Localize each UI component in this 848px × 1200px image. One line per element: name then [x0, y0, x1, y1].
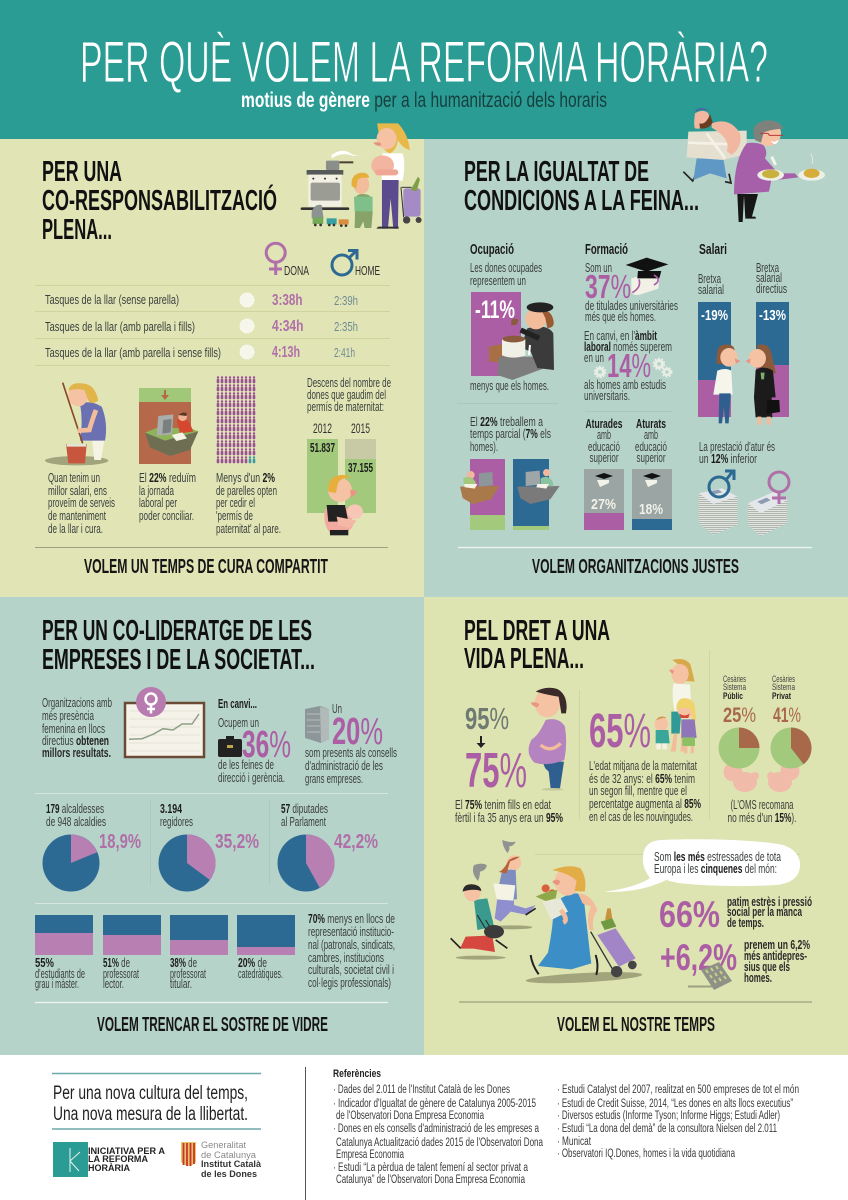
stat: 37%: 37% [585, 268, 631, 305]
chart: caesareans: (L'OMS recomana [730, 797, 794, 812]
text: better salary: proveïm de serveis [48, 495, 115, 510]
stat: 95% to 75%: 95% [465, 701, 509, 736]
chart: maternity leave decline [307, 375, 391, 513]
gender symbols and columns [266, 243, 380, 278]
heading: per un co-lideratge: PER UN CO-LIDERATGE DE LES [42, 615, 312, 647]
column: formació: En canvi, en l'àmbit [584, 328, 657, 343]
logo: iniciativa per a la reforma horària: LA REFORMA [88, 1154, 148, 1165]
illustration: rushing women [451, 840, 642, 985]
logo: generalitat institut català de les dones: Institut Català [201, 1159, 262, 1169]
stat: 95% to 75% [455, 701, 563, 825]
references [333, 1068, 799, 1186]
column: formació: més que els homes. [585, 309, 656, 324]
column: formació: educació [588, 439, 620, 454]
table: hours of housework: Tasques de la llar (sense parella) [45, 292, 179, 307]
text: better results: Organitzacions amb [42, 695, 112, 710]
text: paternity leave [216, 470, 281, 536]
column: ocupació: menys que els homes. [470, 378, 549, 393]
stat: 65% second child: en el cas de les nouvingudes. [589, 809, 693, 824]
stat: 65% second child [589, 705, 701, 824]
stat: 65% second child: 65% [589, 705, 651, 758]
chart: caesareans: Cesàries [772, 674, 795, 685]
illustration: woman mopping [45, 383, 108, 465]
column: ocupació: Les dones ocupades [470, 260, 542, 275]
text: 22% reduce working day [139, 470, 196, 523]
column: formació: superior [636, 450, 666, 465]
table: hours of housework: 2:35h [334, 319, 358, 334]
icon: money stacks and gender symbols [699, 471, 789, 536]
bars: unemployed with higher education: 27% [591, 496, 616, 513]
stat: +6,2%: prenem un 6,2% [744, 937, 810, 952]
references: Referències [333, 1068, 381, 1080]
pie chart: diputades [278, 801, 378, 892]
bar: -11% [471, 292, 521, 376]
column: formació: en un [584, 350, 604, 365]
footer [0, 1055, 848, 1200]
pie chart: regidores: regidores [160, 814, 193, 829]
chart: caesareans: Privat [772, 691, 792, 702]
illustration: mother, child and stove [301, 123, 422, 229]
icon: fetuses [724, 762, 800, 792]
references: Catalunya” de l'Observatori Dona Empresa Economia [336, 1174, 525, 1186]
text: better results [42, 695, 112, 760]
chart: caesareans [718, 674, 812, 825]
gender symbols and columns: HOME [355, 263, 380, 278]
column: salari: Bretxa [756, 260, 779, 275]
panel: co-responsabilització [0, 123, 424, 597]
bars: education glass ceiling: 20% de [238, 955, 267, 970]
column: formació: amb [644, 427, 658, 442]
table: hours of housework: Tasques de la llar (amb parella i fills) [45, 319, 195, 334]
pie chart: regidores: 35,2% [215, 831, 259, 853]
bars: education glass ceiling: professorat [103, 966, 139, 981]
column: formació [584, 242, 678, 530]
panel: igualtat de condicions [424, 108, 848, 597]
text: 70% fewer: 70% menys en llocs de [308, 911, 395, 926]
heading: per la igualtat de condicions: CONDICIONS A LA FEINA... [464, 185, 699, 217]
stat: 66%: social per la manca [727, 904, 802, 919]
slogan: VOLEM UN TEMPS DE CURA COMPARTIT [84, 556, 328, 578]
illustration: man with box and grandmother with plates [683, 108, 825, 222]
bars: education glass ceiling: grau i màster. [35, 976, 79, 991]
bars: education glass ceiling [35, 915, 295, 991]
stat: +6,2%: més antidepres- [744, 948, 807, 963]
tagline: Per una nova cultura del temps, [53, 1083, 248, 1104]
text: 70% fewer: cambres, institucions [308, 950, 384, 965]
column: formació: Aturades [586, 416, 622, 431]
stat: 65% second child: L'edat mitjana de la maternitat [589, 758, 697, 773]
chart: board with rising line [125, 687, 204, 757]
callout: speech bubble [604, 839, 800, 892]
table: hours of housework [35, 286, 390, 366]
stat: 66%: 66% [659, 894, 720, 935]
references: · Municat [557, 1136, 592, 1148]
text: paternity leave: Menys d'un 2% [216, 470, 275, 485]
column: formació: Formació [585, 242, 628, 258]
pie chart: alcaldesses: de 948 alcaldies [46, 814, 106, 829]
illustration: mother with two children [655, 659, 697, 753]
icon: graduation cap and diploma [626, 258, 668, 295]
heading: pel dret a una vida plena: VIDA PLENA... [464, 643, 584, 675]
bars: salary gap: -19% [701, 308, 728, 324]
bars: part-time [470, 459, 549, 530]
stat: +6,2%: sius que els [744, 959, 790, 974]
stat: 36%: En canvi... [218, 696, 257, 711]
references: · Estudi “La pèrdua de talent femení al sector privat a [333, 1162, 528, 1174]
text: 22% reduce working day: la jornada [139, 483, 174, 498]
heading: per la igualtat de condicions [464, 156, 699, 217]
text: better results: millors resultats. [42, 745, 111, 760]
bars: education glass ceiling: 51% de [103, 955, 130, 970]
text: paternity leave: paternitat' al pare. [216, 521, 281, 536]
header band [0, 0, 848, 139]
stat: 36%: de les feines de [218, 757, 274, 772]
chart: caesareans: Sistema [772, 682, 795, 693]
column: salari: salarial [698, 282, 724, 297]
column: ocupació [457, 242, 560, 530]
heading: per un co-lideratge [42, 615, 315, 676]
chart: maternity leave decline: dones que gaudim del [307, 387, 386, 402]
heading: pel dret a una vida plena [464, 615, 610, 675]
text: 22% reduce working day: El 22% reduïm [139, 470, 196, 485]
tagline: Una nova mesura de la llibertat. [53, 1104, 248, 1125]
stat: 65% second child: un segon fill, mentre que el [589, 783, 687, 798]
stat: 66%: de temps. [727, 915, 764, 930]
column: formació: universitaris. [584, 388, 630, 403]
stat: 95% to 75%: 75% [465, 744, 527, 798]
subtitle: motius de gènere per a la humanització dels horaris [241, 88, 607, 112]
stat: +6,2%: homes. [744, 970, 772, 985]
text: 22% reduce working day: poder conciliar. [139, 508, 194, 523]
column: salari: directius [756, 281, 787, 296]
table: hours of housework: 3:38h [272, 292, 302, 309]
logo: generalitat institut català de les dones: de les Dones [201, 1169, 257, 1179]
column: formació: amb [597, 427, 611, 442]
stat: 20%: d'administració de les [305, 758, 383, 773]
heading: per una co-responsabilització plena: PER UNA [42, 156, 122, 188]
illustration: part-time desks [460, 469, 560, 504]
references: · Dones en els consells d'administració de les empreses a [333, 1123, 539, 1135]
pie chart: alcaldesses [42, 801, 141, 892]
heading: per una co-responsabilització plena: CO-RESPONSABILITZACIÓ [42, 183, 277, 217]
divider [458, 546, 812, 548]
column: salari: Salari [699, 242, 727, 258]
column: salari: La prestació d'atur és [699, 439, 775, 454]
stat: 65% second child: és de 32 anys: el 65% tenim [589, 771, 695, 786]
references: · Indicador d'Igualtat de gènere de Catalunya 2005-2015 [333, 1098, 536, 1110]
references: · Observatori IQ.Dones, homes i la vida quotidiana [557, 1148, 735, 1160]
divider [35, 546, 388, 548]
icon: people grid of parents [216, 376, 256, 464]
illustration: desk with reduced working day [139, 388, 198, 464]
bars: education glass ceiling: lector. [103, 976, 124, 991]
slogan: VOLEM TRENCAR EL SOSTRE DE VIDRE [97, 1014, 328, 1036]
pie chart: diputades: 42,2% [334, 831, 378, 853]
column: formació: Som un [585, 260, 612, 275]
stat: 95% to 75%: fèrtil i fa 35 anys era un 95% [455, 810, 563, 825]
logo: iniciativa per a la reforma horària: HORÀRIA [88, 1163, 130, 1174]
stat: +6,2%: +6,2% [660, 937, 737, 978]
stat: 14%: 14% [607, 347, 651, 384]
stat: 20%: som presents als consells [305, 745, 397, 760]
logo: iniciativa per a la reforma horària: INICIATIVA PER A [88, 1146, 165, 1157]
heading: per una co-responsabilització plena: PLENA... [42, 214, 112, 246]
column: formació: Aturats [636, 416, 666, 431]
logo: generalitat institut català de les dones: Generalitat [201, 1140, 247, 1150]
text: paternity leave: de parelles opten [216, 483, 277, 498]
column: ocupació: representem un [470, 273, 526, 288]
table: hours of housework: 4:34h [272, 318, 304, 335]
table: hours of housework: Tasques de la llar (amb parella i sense fills) [45, 345, 221, 360]
pie chart: diputades: al Parlament [281, 814, 326, 829]
stat: -11%: -11% [475, 296, 515, 324]
pie chart: diputades: 57 diputades [281, 801, 328, 816]
column: salari [698, 242, 789, 536]
text: 22% reduce working day: laboral per [139, 495, 177, 510]
heading: pel dret a una vida plena: PEL DRET A UNA [464, 615, 610, 647]
illustration: breastfeeding mother [324, 475, 363, 535]
panel: dret a una vida plena [424, 597, 848, 1055]
text: paternity leave: per cedir el [216, 495, 255, 510]
column: formació: de titulades universitàries [585, 298, 678, 313]
chart: maternity leave decline: 2012 [313, 420, 332, 436]
stat: 36% [218, 696, 291, 785]
column: salari: Bretxa [698, 271, 721, 286]
column: formació: als homes amb estudis [584, 377, 666, 392]
column: ocupació: temps parcial (7% els [470, 426, 551, 441]
text: better salary: de manteniment [48, 508, 106, 523]
bars: unemployed with higher education: 18% [639, 501, 663, 518]
icon: pill pack [688, 962, 732, 990]
column: ocupació: El 22% treballem a [470, 414, 544, 429]
chart: maternity leave decline: 37.155 [348, 461, 373, 475]
bars: education glass ceiling: professorat [170, 966, 206, 981]
stat: 65% second child: percentatge augmenta al 85% [589, 796, 701, 811]
stat: 66% [659, 894, 812, 935]
references: de l'Observatori Dona Empresa Economia [336, 1110, 484, 1122]
bars: education glass ceiling: titular. [170, 976, 192, 991]
chart: caesareans: Cesàries [723, 674, 746, 685]
callout: speech bubble: Europa i les cinquenes del món: [654, 861, 777, 876]
bars: unemployed with higher education [584, 469, 672, 530]
stat: 20%: Un [332, 701, 342, 716]
stat: 20%: 20% [332, 711, 383, 753]
illustration: two women talking [713, 344, 780, 425]
text: 70% fewer: nal (patronals, sindicats, [308, 937, 395, 952]
bars: education glass ceiling: 55% [35, 955, 54, 970]
pie chart: alcaldesses: 18,9% [99, 831, 141, 853]
text: better salary [48, 470, 115, 536]
table: hours of housework: 4:13h [272, 344, 300, 361]
stat: 36%: direcció i gerència. [218, 770, 285, 785]
bars: salary gap [698, 302, 789, 417]
table: hours of housework: 2:41h [334, 345, 355, 360]
text: 70% fewer: representació institucio- [308, 924, 394, 939]
stat: 36%: 36% [242, 724, 291, 766]
chart: caesareans: no més d'un 15%). [728, 810, 796, 825]
slogan: VOLEM EL NOSTRE TEMPS [557, 1014, 715, 1036]
callout: speech bubble: Som les més estressades de tota [654, 849, 781, 864]
references: Catalunya Actualització dades 2015 de l'Observatori Dona [336, 1137, 543, 1149]
column: formació: laboral només superem [584, 339, 672, 354]
text: better salary: millor salari, ens [48, 483, 107, 498]
chart: maternity leave decline: 51.837 [310, 441, 335, 455]
pie chart: alcaldesses: 179 alcaldesses [46, 801, 104, 816]
column: formació: superior [590, 450, 619, 465]
column: salari: salarial [756, 270, 782, 285]
text: better results: més presència [42, 708, 94, 723]
text: 70% fewer: culturals, societat civil i [308, 962, 394, 977]
text: 70% fewer: col·legis professionals) [308, 975, 391, 990]
chart: maternity leave decline: 2015 [351, 420, 370, 436]
column: ocupació: Ocupació [470, 242, 514, 258]
chart: maternity leave decline: Descens del nombre de [307, 375, 391, 390]
pie chart: regidores [158, 801, 259, 892]
stat: 36%: Ocupem un [218, 715, 259, 730]
stat: 20%: grans empreses. [305, 771, 363, 786]
stat: 20% [305, 701, 397, 786]
gender symbols and columns: DONA [284, 263, 309, 278]
column: salari: un 12% inferior [699, 451, 757, 466]
references: Empresa Economia [336, 1149, 404, 1161]
chart: maternity leave decline: permís de maternitat: [307, 399, 384, 414]
bars: education glass ceiling: d'estudiants de [35, 966, 85, 981]
table: hours of housework: 2:39h [334, 293, 358, 308]
logo: generalitat institut català de les dones [181, 1140, 262, 1179]
illustration: pregnant woman [529, 688, 567, 791]
stat: 95% to 75%: El 75% tenim fills en edat [455, 797, 551, 812]
logo: iniciativa per a la reforma horària [53, 1142, 165, 1177]
text: paternity leave: 'permís de [216, 508, 253, 523]
panel: co-lideratge [0, 597, 424, 1055]
text: better results: femenina en llocs [42, 721, 105, 736]
tagline [52, 1074, 261, 1129]
column: formació: educació [635, 439, 667, 454]
heading: per una co-responsabilització plena [42, 156, 277, 246]
heading: per la igualtat de condicions: PER LA IGUALTAT DE [464, 156, 649, 188]
bars: education glass ceiling: catedràtiques. [238, 966, 283, 981]
column: ocupació: homes). [470, 439, 498, 454]
heading: per un co-lideratge: EMPRESES I DE LA SOCIETAT... [42, 644, 315, 676]
pie chart: regidores: 3.194 [160, 801, 183, 816]
stat: +6,2% [660, 937, 810, 990]
chart: caesareans: 41% [773, 704, 801, 727]
chart: caesareans: Públic [723, 691, 743, 702]
references: · Dades del 2.011 de l'Institut Català de les Dones [333, 1084, 510, 1096]
logo: generalitat institut català de les dones: de Catalunya [201, 1150, 256, 1160]
text: better salary: de la llar i cura. [48, 521, 103, 536]
chart: caesareans: 25% [723, 704, 756, 727]
text: 70% fewer [308, 911, 395, 990]
chart: caesareans: Sistema [723, 682, 746, 693]
bars: education glass ceiling: 38% de [170, 955, 197, 970]
icon: gears [594, 358, 672, 378]
text: better salary: Quan tenim un [48, 470, 100, 485]
text: better results: directius obtenen [42, 733, 109, 748]
bars: salary gap: -13% [759, 308, 786, 324]
illustration: woman cooking [489, 302, 554, 380]
